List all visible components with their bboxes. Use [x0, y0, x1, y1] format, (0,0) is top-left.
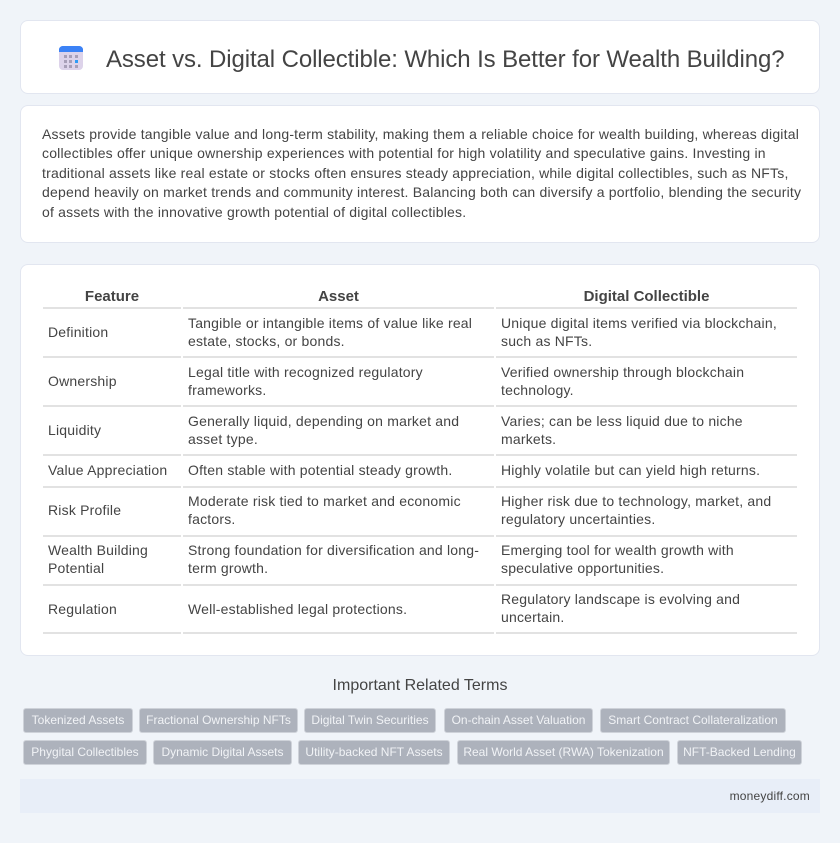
- term chips: Utility-backed NFT Assets: [305, 745, 443, 759]
- table rows text: Risk Profile: [48, 502, 121, 518]
- comparison table: Asset: [318, 288, 359, 305]
- table rows text: Verified ownership through blockchain: [501, 364, 744, 380]
- table rows text: such as NFTs.: [501, 333, 592, 349]
- table rows text: factors.: [188, 511, 236, 527]
- table rows text: Strong foundation for diversification and long-: [188, 542, 479, 558]
- term chips: NFT-Backed Lending: [683, 745, 796, 759]
- intro text: [42, 126, 801, 220]
- table rows text: Legal title with recognized regulatory: [188, 364, 423, 380]
- table rows text: markets.: [501, 431, 556, 447]
- table rows text: Well-established legal protections.: [188, 601, 407, 617]
- table rows text: term growth.: [188, 560, 268, 576]
- table panel: [20, 264, 820, 656]
- table rows text: regulatory uncertainties.: [501, 511, 655, 527]
- comparison table: Feature: [85, 288, 139, 305]
- table rows text: Regulatory landscape is evolving and: [501, 591, 740, 607]
- table rows text: asset type.: [188, 431, 258, 447]
- table rows text: Highly volatile but can yield high returns.: [501, 462, 760, 478]
- term chips: On-chain Asset Valuation: [452, 713, 585, 727]
- term chips: Dynamic Digital Assets: [161, 745, 284, 759]
- term chips: Real World Asset (RWA) Tokenization: [463, 745, 664, 759]
- footer: [20, 779, 820, 813]
- term chips: Tokenized Assets: [32, 713, 124, 727]
- table rows text: Potential: [48, 560, 104, 576]
- table rows text: Higher risk due to technology, market, and: [501, 493, 771, 509]
- intro text: collectibles offer unique ownership experiences with potential for high volatility and speculative gains. Investing in: [42, 145, 766, 161]
- table rows text: technology.: [501, 382, 574, 398]
- intro panel: [20, 105, 820, 243]
- intro text: depend heavily on market trends and community interest. Balancing both can diversify a portfolio, blending the security: [42, 184, 801, 200]
- table rows text: speculative opportunities.: [501, 560, 664, 576]
- table rows text: Varies; can be less liquid due to niche: [501, 413, 743, 429]
- table rows text: Generally liquid, depending on market and: [188, 413, 459, 429]
- term chips: Phygital Collectibles: [31, 745, 139, 759]
- title: Asset vs. Digital Collectible: Which Is Better for Wealth Building?: [106, 46, 784, 73]
- table rows text: Wealth Building: [48, 542, 148, 558]
- table rows text: Ownership: [48, 373, 117, 389]
- footer source: moneydiff.com: [730, 789, 810, 803]
- term chips: [23, 708, 802, 765]
- table rows text: Regulation: [48, 601, 117, 617]
- icon: calendar: [59, 46, 83, 70]
- comparison table: Digital Collectible: [584, 288, 709, 305]
- table rows text: frameworks.: [188, 382, 266, 398]
- term chips: Fractional Ownership NFTs: [146, 713, 291, 727]
- intro text: Assets provide tangible value and long-term stability, making them a reliable choice for wealth building, whereas digital: [42, 126, 799, 142]
- table rows text: Emerging tool for wealth growth with: [501, 542, 734, 558]
- table rows text: Definition: [48, 324, 108, 340]
- intro text: traditional assets like real estate or stocks often ensures steady appreciation, while digital collectibles, such as NFTs,: [42, 165, 789, 181]
- table rows text: Value Appreciation: [48, 462, 167, 478]
- table rows text: Tangible or intangible items of value like real: [188, 315, 472, 331]
- related terms heading: Important Related Terms: [333, 677, 507, 694]
- intro text: of assets with the innovative growth potential of digital collectibles.: [42, 204, 466, 220]
- header card: [20, 20, 820, 94]
- table rows text: Liquidity: [48, 422, 101, 438]
- table rows text: Unique digital items verified via blockchain,: [501, 315, 777, 331]
- table rows text: Often stable with potential steady growth.: [188, 462, 452, 478]
- term chips: Smart Contract Collateralization: [608, 713, 778, 727]
- comparison table: [85, 288, 709, 305]
- term chips: Digital Twin Securities: [311, 713, 429, 727]
- table rows text: estate, stocks, or bonds.: [188, 333, 345, 349]
- table rows text: uncertain.: [501, 609, 564, 625]
- table rows text: [48, 315, 777, 625]
- table rows text: Moderate risk tied to market and economic: [188, 493, 461, 509]
